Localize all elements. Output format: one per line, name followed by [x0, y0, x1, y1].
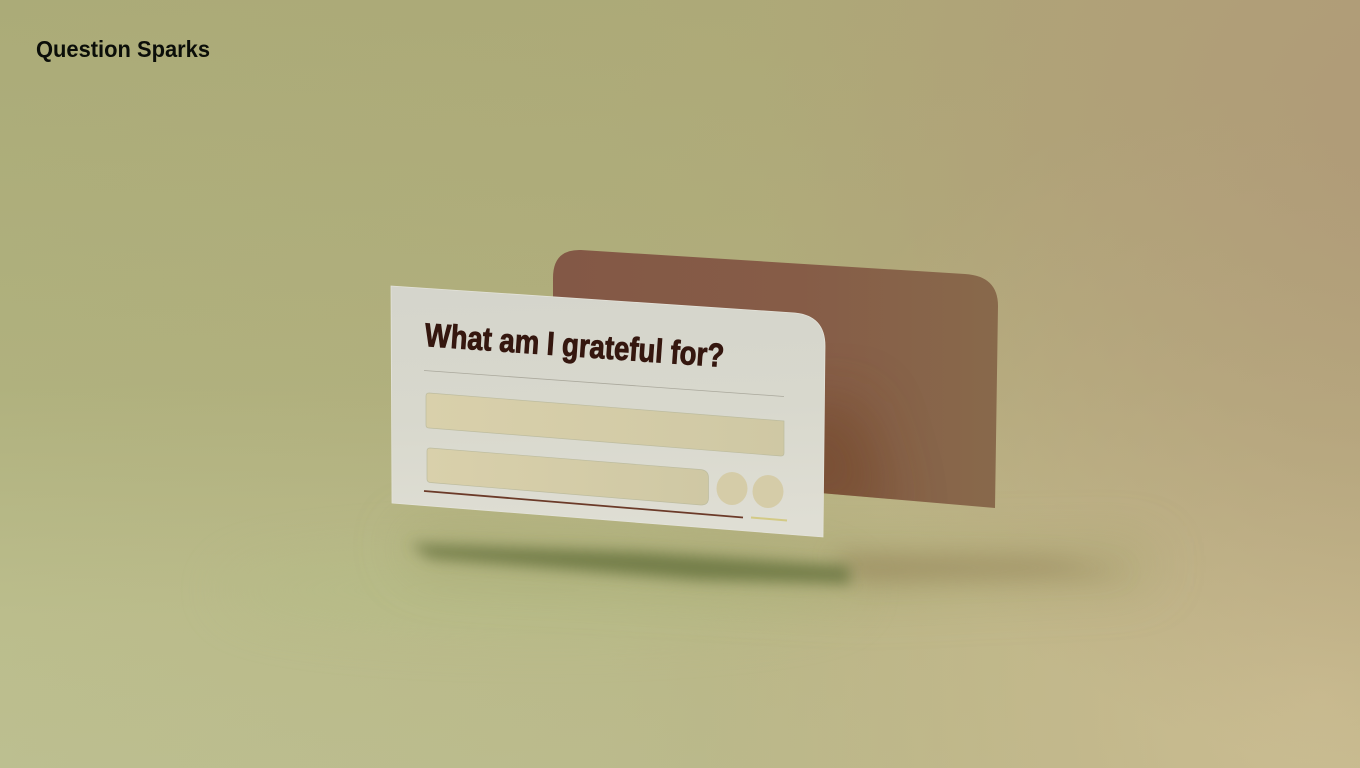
back card: [553, 250, 998, 520]
shadow cast on back card: [824, 394, 892, 499]
progress remainder line: [751, 518, 787, 520]
question heading: What am I grateful for?: [424, 316, 725, 374]
answer dot 2: [752, 475, 784, 508]
floor shadow: [220, 535, 1150, 630]
answer bar 2: [427, 448, 708, 505]
brand title: Question Sparks: [36, 36, 210, 62]
divider: [424, 370, 784, 396]
answer bar 1: [426, 393, 784, 456]
front card: [391, 286, 825, 537]
progress line: [424, 491, 743, 518]
answer dot 1: [716, 472, 748, 505]
